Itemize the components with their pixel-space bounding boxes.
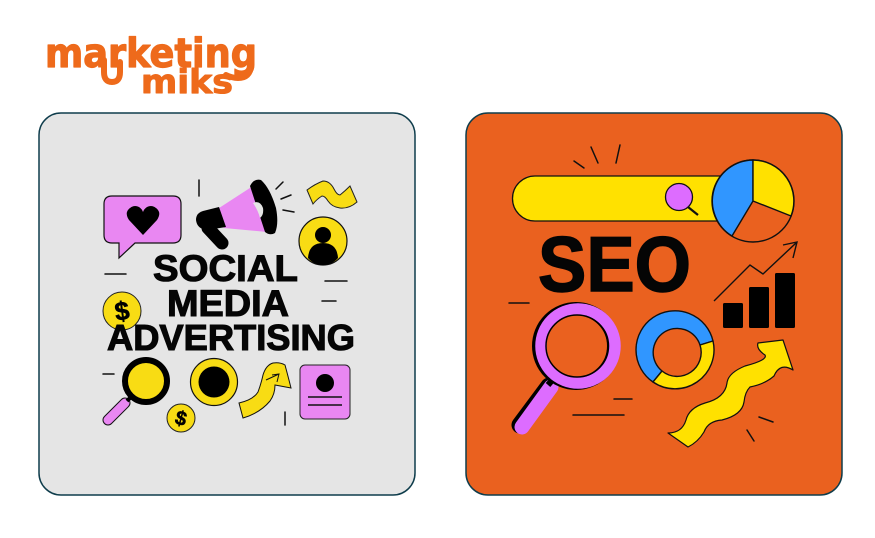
icon: wavy yellow arrow xyxy=(668,340,793,447)
panel: social media advertising xyxy=(39,113,415,495)
logo: marketing miks: marketing xyxy=(45,31,257,77)
heading: seo: SEO xyxy=(538,220,691,308)
icon: sound rays xyxy=(103,180,347,425)
icon: yellow curved arrow xyxy=(239,363,291,418)
donut chart xyxy=(636,311,714,389)
icon: growth arrow xyxy=(714,242,797,301)
icon: profile card xyxy=(300,365,350,419)
icon: yellow magnifier xyxy=(108,360,167,420)
icon: target circle xyxy=(190,358,238,406)
icon: large magnifier xyxy=(520,308,615,427)
heading: social media advertising: ADVERTISING xyxy=(107,317,355,358)
icon: megaphone xyxy=(196,180,277,243)
icon: yellow squiggle xyxy=(307,181,357,208)
bar chart xyxy=(723,273,795,328)
logo: marketing miks: miks xyxy=(141,62,233,101)
icon: dollar coin small xyxy=(167,404,195,432)
heading: social media advertising xyxy=(107,248,355,358)
panel: seo xyxy=(466,113,842,495)
icon: dollar coin large xyxy=(103,292,141,330)
logo: marketing miks xyxy=(45,31,257,101)
search bar xyxy=(512,176,730,221)
icon: person avatar xyxy=(299,217,347,265)
icon: dollar coin large: $ xyxy=(113,295,132,327)
icon: small magnifier xyxy=(666,184,698,215)
icon: dollar coin small: $ xyxy=(173,407,189,431)
icon: speech bubble with heart xyxy=(104,196,181,258)
pie chart xyxy=(712,160,794,242)
heading: social media advertising: SOCIAL xyxy=(153,248,298,289)
heading: social media advertising: MEDIA xyxy=(167,283,289,324)
icon: sparkle rays xyxy=(509,145,773,441)
